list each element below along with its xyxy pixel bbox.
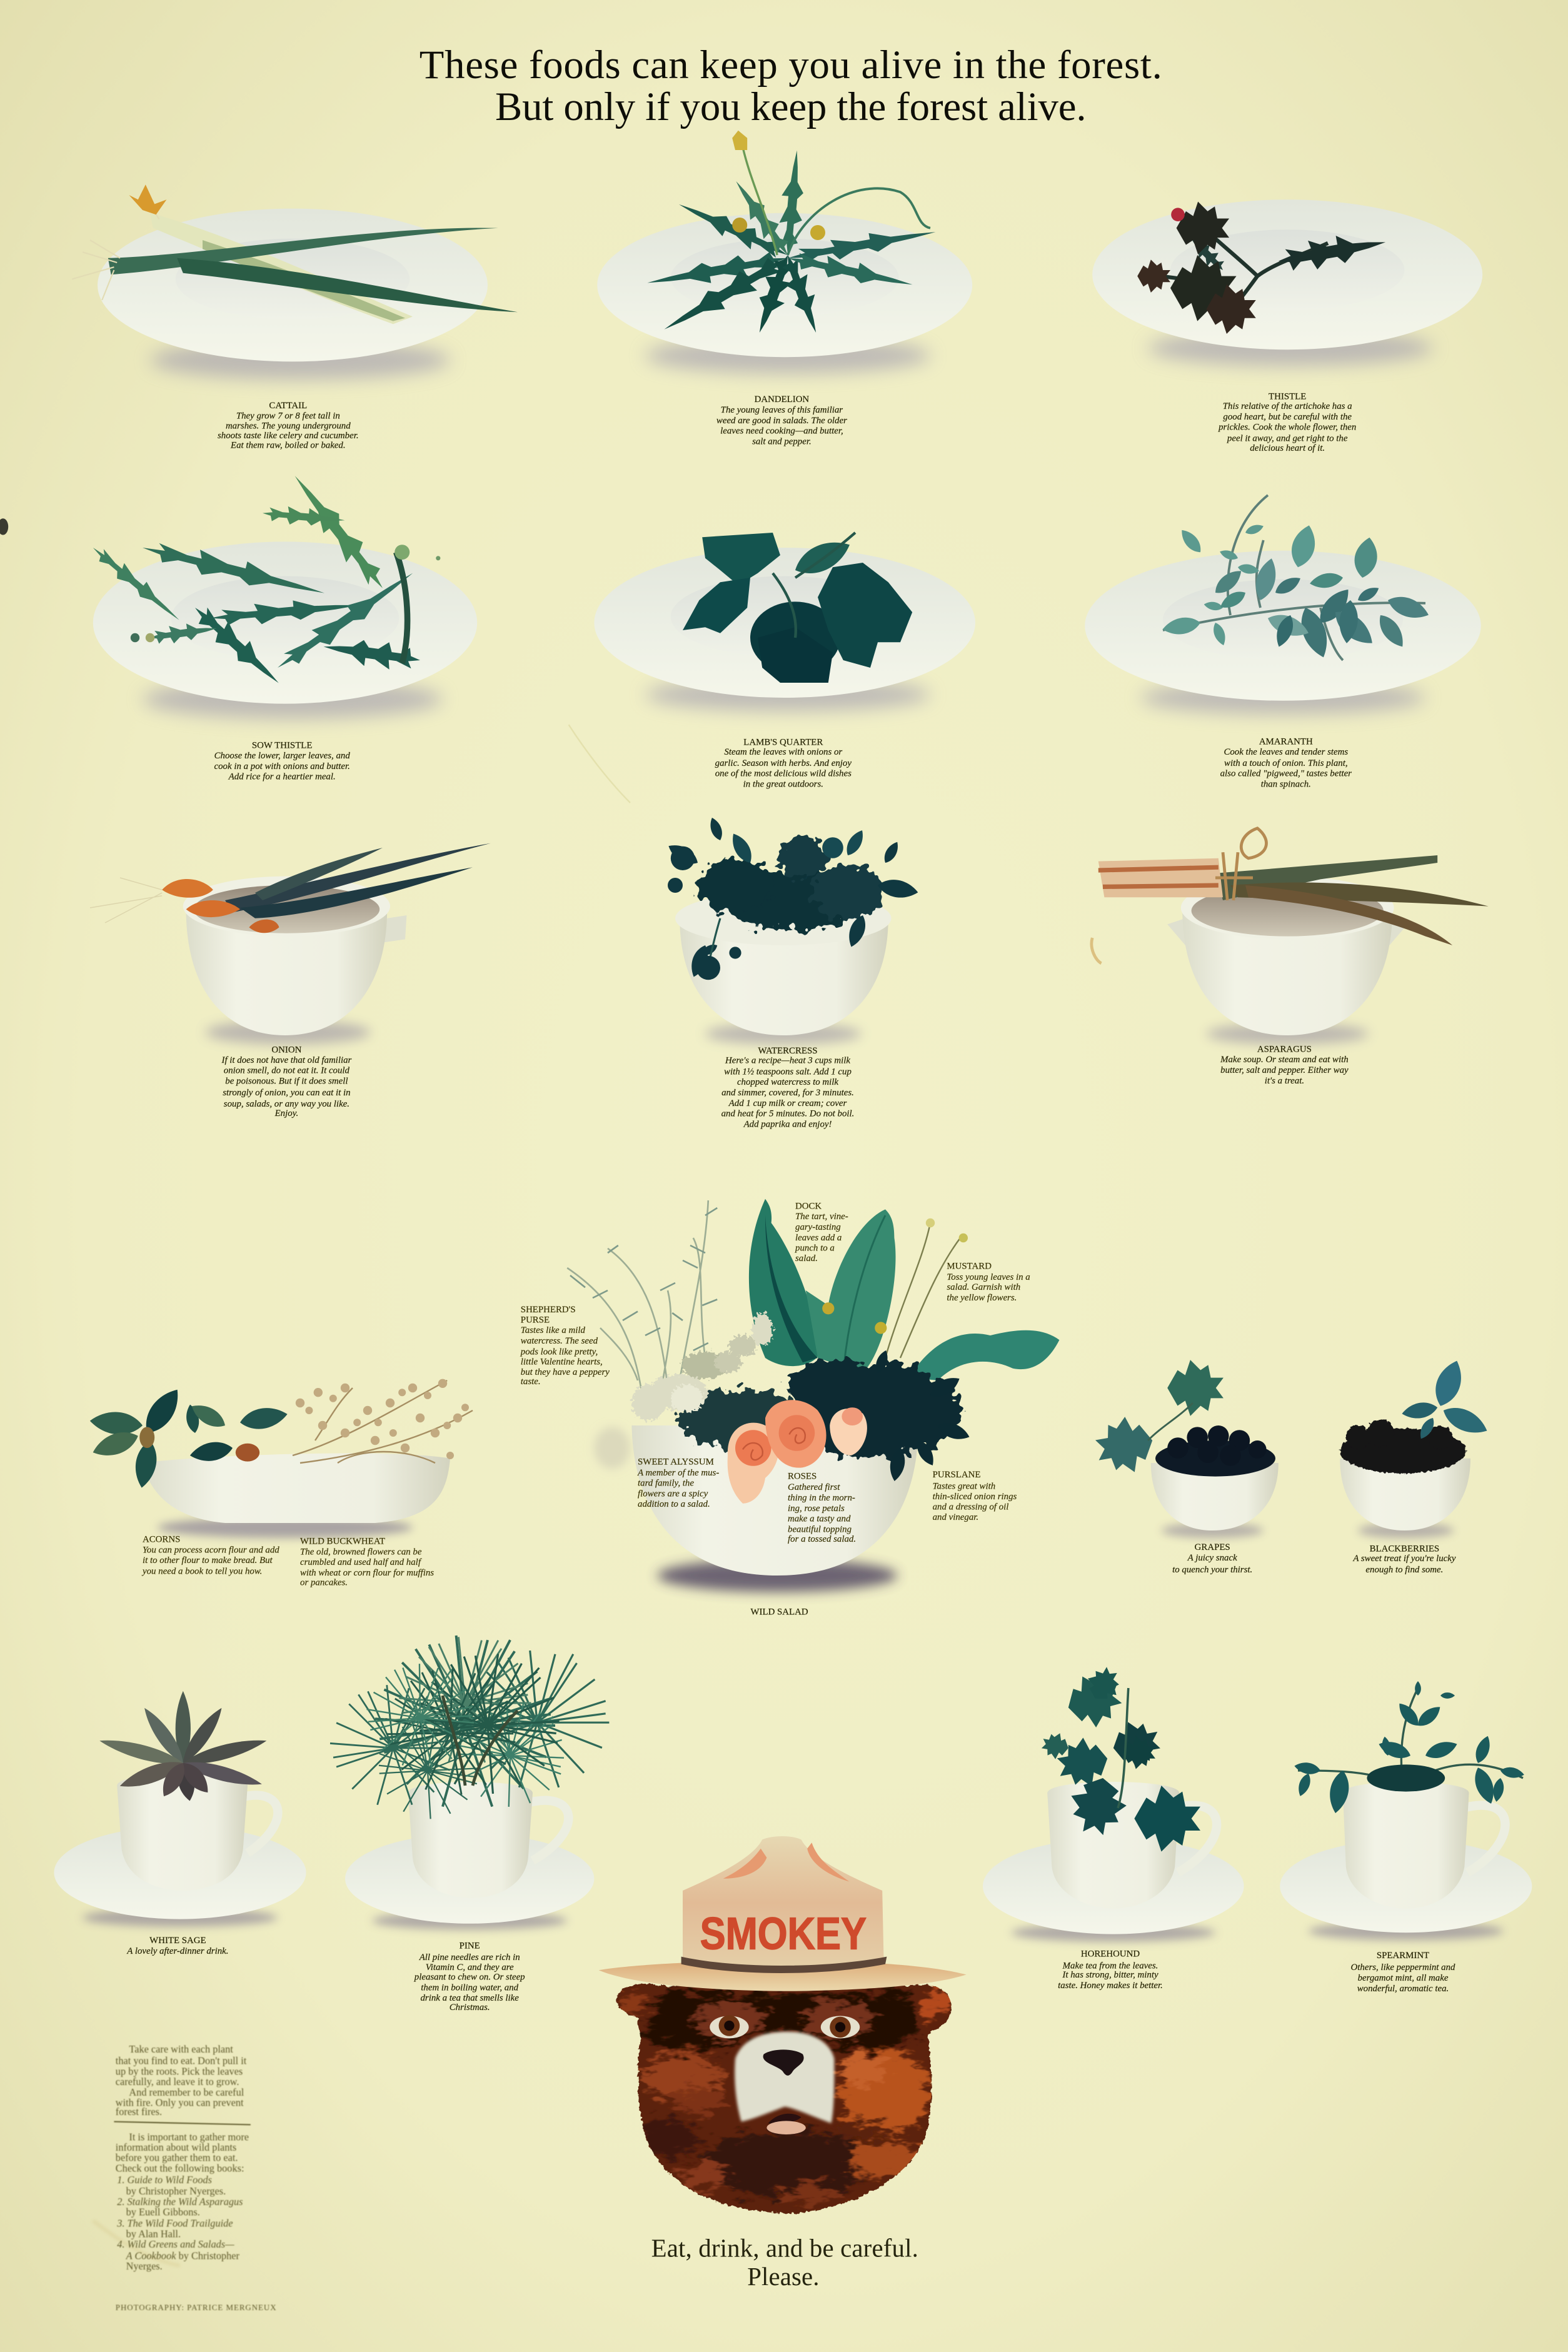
caption: acorns: you need a book to tell you how. bbox=[141, 1567, 262, 1577]
caption: watercress: Here's a recipe—heat 3 cups milk bbox=[725, 1055, 850, 1065]
caption: sweet alyssum: SWEET ALYSSUM bbox=[638, 1457, 714, 1467]
caption: amaranth: AMARANTH bbox=[1259, 736, 1313, 746]
plant: sow thistle bbox=[88, 468, 440, 692]
plant: pine bbox=[330, 1636, 609, 1828]
plant: dandelion bbox=[645, 131, 937, 340]
bear head bbox=[616, 1980, 952, 2213]
caption: roses: ROSES bbox=[788, 1472, 817, 1482]
text block: care note and book list: 1. Guide to Wild Foods bbox=[117, 2174, 212, 2186]
plant: spearmint bbox=[1294, 1681, 1525, 1815]
caption: spearmint: bergamot mint, all make bbox=[1358, 1973, 1449, 1983]
credit: PHOTOGRAPHY: PATRICE MERGNEUX bbox=[116, 2303, 276, 2312]
caption: horehound: It has strong, bitter, minty bbox=[1062, 1970, 1158, 1980]
panel: sow thistle bbox=[88, 468, 477, 782]
caption: watercress: and simmer, covered, for 3 minutes. bbox=[721, 1088, 854, 1098]
caption: shepherd's purse: but they have a peppery bbox=[521, 1367, 610, 1377]
caption: thistle: THISTLE bbox=[1269, 391, 1306, 401]
caption: asparagus: Make soup. Or steam and eat with bbox=[1220, 1055, 1349, 1065]
caption: sow thistle: Add rice for a heartier meal. bbox=[228, 772, 336, 782]
text block: care note and book list: by Alan Hall. bbox=[126, 2228, 181, 2239]
text block: care note and book list: It is important to gather more bbox=[129, 2131, 249, 2143]
caption: cattail: They grow 7 or 8 feet tall in bbox=[236, 411, 340, 421]
caption: mustard: Toss young leaves in a bbox=[947, 1272, 1030, 1282]
caption: watercress: Add paprika and enjoy! bbox=[743, 1119, 832, 1129]
caption: horehound: taste. Honey makes it better. bbox=[1058, 1981, 1163, 1991]
caption: amaranth: Cook the leaves and tender stems bbox=[1224, 747, 1348, 757]
caption: pine: them in boiling water, and bbox=[421, 1983, 519, 1993]
text block: care note and book list: 4. Wild Greens and Salads— bbox=[117, 2238, 234, 2250]
text block: care note and book list: 2. Stalking the Wild Asparagus bbox=[117, 2196, 243, 2208]
panel: dandelion bbox=[597, 131, 972, 446]
caption: pine: All pine needles are rich in bbox=[419, 1952, 520, 1963]
text block: care note and book list: 3. The Wild Food Trailguide bbox=[116, 2218, 233, 2229]
caption: blackberries: enough to find some. bbox=[1365, 1565, 1443, 1575]
plant: lamb's quarter bbox=[683, 533, 912, 683]
eyes bbox=[710, 2015, 860, 2038]
caption: roses: thing in the morn- bbox=[788, 1493, 855, 1503]
caption: watercress: and heat for 5 minutes. Do not boil. bbox=[721, 1109, 854, 1119]
caption: amaranth: than spinach. bbox=[1261, 779, 1311, 789]
caption: lamb's quarter: Steam the leaves with onions or bbox=[724, 747, 842, 757]
caption: white sage: A lovely after-dinner drink. bbox=[126, 1946, 228, 1956]
caption: asparagus: ASPARAGUS bbox=[1257, 1044, 1312, 1054]
caption: purslane: Tastes great with bbox=[933, 1481, 995, 1491]
bowl: wild salad bbox=[594, 1425, 918, 1592]
bowl: watercress bbox=[675, 892, 892, 1044]
caption: asparagus: it's a treat. bbox=[1265, 1076, 1304, 1086]
panel: grapes bbox=[1092, 1360, 1279, 1575]
caption: shepherd's purse: little Valentine hearts, bbox=[521, 1357, 603, 1367]
caption: roses: ing, rose petals bbox=[788, 1504, 845, 1514]
caption: purslane: and a dressing of oil bbox=[933, 1502, 1008, 1512]
caption: cattail: shoots taste like celery and cucumber. bbox=[218, 431, 359, 441]
title bbox=[420, 43, 1162, 129]
caption: wild buckwheat: The old, browned flowers can be bbox=[300, 1547, 422, 1557]
text block: care note and book list bbox=[114, 2043, 276, 2312]
panel: blackberries bbox=[1340, 1357, 1491, 1575]
text block: care note and book list: forest fires. bbox=[116, 2106, 162, 2118]
caption: horehound: Make tea from the leaves. bbox=[1062, 1961, 1158, 1971]
caption: thistle: delicious heart of it. bbox=[1250, 443, 1325, 453]
caption: shepherd's purse: Tastes like a mild bbox=[521, 1325, 586, 1335]
caption: horehound: HOREHOUND bbox=[1081, 1949, 1140, 1959]
dish bbox=[143, 1454, 450, 1538]
caption: sweet alyssum: addition to a salad. bbox=[638, 1499, 710, 1509]
cup and saucer: horehound bbox=[983, 1782, 1244, 1942]
caption: sweet alyssum: tard family, the bbox=[638, 1479, 694, 1489]
caption: grapes: GRAPES bbox=[1195, 1542, 1230, 1552]
caption: spearmint: SPEARMINT bbox=[1377, 1951, 1429, 1961]
panel: acorns and wild buckwheat bbox=[89, 1379, 473, 1588]
panel: spearmint bbox=[1280, 1681, 1532, 1994]
title: These foods can keep you alive in the forest. bbox=[420, 43, 1162, 88]
tagline: Please. bbox=[747, 2263, 819, 2291]
caption: onion: onion smell, do not eat it. It could bbox=[224, 1066, 350, 1076]
caption: spearmint: Others, like peppermint and bbox=[1351, 1963, 1455, 1973]
caption: wild buckwheat: or pancakes. bbox=[300, 1578, 348, 1588]
caption: watercress: WATERCRESS bbox=[758, 1046, 818, 1056]
caption: onion: soup, salads, or any way you like. bbox=[224, 1099, 349, 1109]
plate: cattail bbox=[98, 209, 488, 379]
plant: cattail bbox=[72, 184, 518, 324]
caption: purslane: PURSLANE bbox=[933, 1470, 980, 1480]
caption: purslane: and vinegar. bbox=[933, 1512, 978, 1522]
bowl: blackberries bbox=[1340, 1459, 1470, 1538]
plant: amaranth bbox=[1161, 495, 1432, 661]
caption: blackberries: A sweet treat if you're lucky bbox=[1352, 1554, 1456, 1564]
caption: sow thistle: Choose the lower, larger leaves, and bbox=[214, 751, 350, 761]
caption: shepherd's purse: watercress. The seed bbox=[521, 1336, 598, 1346]
caption: dandelion: The young leaves of this familiar bbox=[721, 405, 843, 415]
caption: acorns: it to other flour to make bread. But bbox=[143, 1555, 273, 1565]
caption: lamb's quarter: garlic. Season with herbs. And enjoy bbox=[715, 758, 852, 768]
text block: care note and book list: with fire. Only you can prevent bbox=[116, 2096, 244, 2108]
caption: thistle: peel it away, and get right to the bbox=[1227, 434, 1348, 444]
caption: onion: be poisonous. But if it does smell bbox=[225, 1076, 348, 1086]
panel: lamb's quarter bbox=[594, 533, 975, 789]
plant: shepherd's purse bbox=[567, 1200, 717, 1418]
title: But only if you keep the forest alive. bbox=[495, 84, 1087, 129]
caption: dandelion: DANDELION bbox=[755, 395, 809, 405]
caption: dandelion: weed are good in salads. The older bbox=[716, 416, 847, 426]
text block: care note and book list: by Christopher Nyerges. bbox=[126, 2185, 226, 2197]
text block: care note and book list: And remember to be careful bbox=[129, 2086, 244, 2098]
illustration: Smokey Bear bbox=[599, 1836, 967, 2213]
caption: sow thistle: SOW THISTLE bbox=[252, 741, 312, 751]
panel: white sage bbox=[54, 1691, 306, 1956]
caption: wild salad: WILD SALAD bbox=[750, 1607, 808, 1617]
plant: white sage bbox=[98, 1691, 268, 1802]
caption: lamb's quarter: one of the most delicious wild dishes bbox=[715, 769, 852, 779]
caption: dock: DOCK bbox=[795, 1201, 822, 1211]
panel: asparagus bbox=[1092, 828, 1489, 1086]
caption: grapes: to quench your thirst. bbox=[1172, 1565, 1252, 1575]
caption: mustard: the yellow flowers. bbox=[947, 1293, 1017, 1303]
caption: roses: Gathered first bbox=[788, 1482, 840, 1492]
plant: sweet alyssum bbox=[631, 1313, 773, 1421]
caption: watercress: Add 1 cup milk or cream; cover bbox=[728, 1098, 847, 1108]
panel: pine bbox=[330, 1636, 609, 2013]
text block: care note and book list: by Euell Gibbons. bbox=[126, 2206, 200, 2218]
cup and saucer: white sage bbox=[54, 1774, 306, 1927]
text block: care note and book list: carefully, and leave it to grow. bbox=[116, 2076, 239, 2088]
caption: pine: Christmas. bbox=[450, 2003, 490, 2013]
bowl: onion bbox=[183, 877, 406, 1044]
ranger hat bbox=[599, 1836, 967, 1991]
plant: blackberries bbox=[1340, 1357, 1491, 1474]
caption: white sage: WHITE SAGE bbox=[149, 1936, 206, 1946]
panel: watercress bbox=[665, 816, 920, 1129]
caption: acorns: ACORNS bbox=[143, 1535, 180, 1545]
text block: care note and book list: Check out the following books: bbox=[116, 2163, 244, 2174]
caption: roses: beautiful topping bbox=[788, 1524, 852, 1534]
cup and saucer: pine bbox=[345, 1782, 594, 1929]
caption: amaranth: also called "pigweed," tastes better bbox=[1220, 769, 1352, 779]
plant: thistle bbox=[1137, 202, 1388, 334]
plate: thistle bbox=[1092, 199, 1482, 366]
caption: thistle: This relative of the artichoke has a bbox=[1223, 401, 1352, 411]
caption: dock: The tart, vine- bbox=[795, 1212, 848, 1222]
plant: onion bbox=[90, 843, 491, 933]
caption: shepherd's purse: SHEPHERD'S bbox=[521, 1305, 576, 1315]
caption: pine: pleasant to chew on. Or steep bbox=[414, 1973, 525, 1983]
caption: roses: for a tossed salad. bbox=[788, 1534, 856, 1544]
plate: lamb's quarter bbox=[594, 548, 975, 711]
panel: horehound bbox=[983, 1662, 1244, 1991]
plant: horehound bbox=[1040, 1662, 1200, 1852]
caption: wild buckwheat: WILD BUCKWHEAT bbox=[300, 1537, 385, 1547]
cup and saucer: spearmint bbox=[1280, 1782, 1532, 1940]
caption: purslane: thin-sliced onion rings bbox=[933, 1492, 1017, 1502]
caption: dock: leaves add a bbox=[795, 1233, 842, 1243]
plant: wild buckwheat bbox=[293, 1379, 473, 1463]
caption: shepherd's purse: taste. bbox=[521, 1377, 541, 1387]
nose and mouth bbox=[763, 2049, 806, 2134]
caption: acorns: You can process acorn flour and add bbox=[143, 1545, 279, 1555]
text block: care note and book list: Nyerges. bbox=[126, 2260, 163, 2272]
caption: wild buckwheat: with wheat or corn flour for muffins bbox=[300, 1568, 434, 1578]
caption: dandelion: salt and pepper. bbox=[752, 436, 812, 446]
panel: onion bbox=[90, 843, 491, 1118]
plate: amaranth bbox=[1085, 551, 1481, 714]
plant: watercress bbox=[665, 816, 920, 980]
caption: sweet alyssum: flowers are a spicy bbox=[638, 1489, 708, 1499]
muzzle bbox=[735, 2032, 834, 2123]
caption: pine: drink a tea that smells like bbox=[420, 1993, 519, 2003]
caption: spearmint: wonderful, aromatic tea. bbox=[1357, 1984, 1449, 1994]
caption: onion: ONION bbox=[271, 1045, 302, 1055]
plant: purslane leaf and mustard bbox=[822, 1219, 1059, 1380]
plant: grapes bbox=[1092, 1360, 1267, 1478]
bowl: asparagus bbox=[1167, 877, 1407, 1044]
caption: asparagus: butter, salt and pepper. Either way bbox=[1220, 1065, 1349, 1075]
caption: thistle: prickles. Cook the whole flower, then bbox=[1218, 423, 1356, 433]
text block: care note and book list: that you find to eat. Don't pull it bbox=[116, 2055, 247, 2067]
caption: amaranth: with a touch of onion. This plant, bbox=[1224, 758, 1348, 768]
caption: roses: make a tasty and bbox=[788, 1514, 851, 1524]
caption: blackberries: BLACKBERRIES bbox=[1370, 1544, 1439, 1554]
caption: onion: If it does not have that old familiar bbox=[221, 1055, 352, 1065]
plate: sow thistle bbox=[93, 541, 477, 719]
text block: care note and book list: Take care with each plant bbox=[129, 2043, 233, 2055]
caption: wild buckwheat: crumbled and used half and half bbox=[300, 1557, 422, 1567]
caption: dock: gary-tasting bbox=[795, 1222, 841, 1232]
caption: dock: salad. bbox=[795, 1254, 818, 1264]
text block: care note and book list: before you gather them to eat. bbox=[116, 2152, 238, 2164]
caption: shepherd's purse: pods look like pretty, bbox=[520, 1347, 598, 1357]
panel: wild salad bbox=[520, 1199, 1059, 1617]
caption: pine: Vitamin C, and they are bbox=[426, 1963, 514, 1973]
caption: sow thistle: cook in a pot with onions and butter. bbox=[214, 761, 350, 771]
panel: thistle bbox=[1092, 199, 1482, 453]
plant: dark greens bbox=[675, 1349, 972, 1482]
caption: pine: PINE bbox=[460, 1941, 480, 1951]
panel: cattail bbox=[72, 184, 518, 451]
caption: dandelion: leaves need cooking—and butter, bbox=[720, 426, 843, 436]
tagline: Eat, drink, and be careful. bbox=[651, 2234, 918, 2263]
caption: mustard: MUSTARD bbox=[947, 1261, 992, 1271]
ranger hat: SMOKEY bbox=[700, 1909, 867, 1959]
text block: care note and book list: information about wild plants bbox=[116, 2141, 236, 2153]
caption: shepherd's purse: PURSE bbox=[521, 1315, 550, 1325]
text block: care note and book list: up by the roots. Pick the leaves bbox=[116, 2065, 243, 2077]
tagline bbox=[651, 2234, 918, 2291]
text block: care note and book list: A Cookbook by Christopher bbox=[126, 2249, 239, 2261]
caption: dock: punch to a bbox=[795, 1244, 835, 1254]
plate: dandelion bbox=[597, 213, 972, 374]
plant: acorns bbox=[89, 1384, 289, 1489]
caption: watercress: chopped watercress to milk bbox=[737, 1077, 838, 1087]
caption: cattail: Eat them raw, boiled or baked. bbox=[230, 441, 346, 451]
plant: dock leaves bbox=[749, 1199, 896, 1373]
caption: cattail: marshes. The young underground bbox=[226, 421, 351, 431]
caption: mustard: salad. Garnish with bbox=[947, 1282, 1020, 1292]
caption: watercress: with 1½ teaspoons salt. Add 1 cup bbox=[724, 1067, 852, 1077]
plant: roses bbox=[728, 1400, 867, 1504]
caption: grapes: A juicy snack bbox=[1187, 1553, 1237, 1563]
caption: cattail: CATTAIL bbox=[269, 401, 307, 411]
caption: onion: Enjoy. bbox=[274, 1108, 298, 1118]
panel: amaranth bbox=[1085, 495, 1481, 789]
caption: onion: strongly of onion, you can eat it in bbox=[223, 1088, 351, 1098]
caption: lamb's quarter: LAMB'S QUARTER bbox=[743, 738, 823, 748]
caption: lamb's quarter: in the great outdoors. bbox=[743, 779, 823, 789]
caption: sweet alyssum: A member of the mus- bbox=[637, 1468, 719, 1478]
bowl: grapes bbox=[1151, 1440, 1279, 1538]
plant: asparagus bbox=[1092, 828, 1489, 963]
caption: thistle: good heart, but be careful with the bbox=[1223, 412, 1352, 422]
